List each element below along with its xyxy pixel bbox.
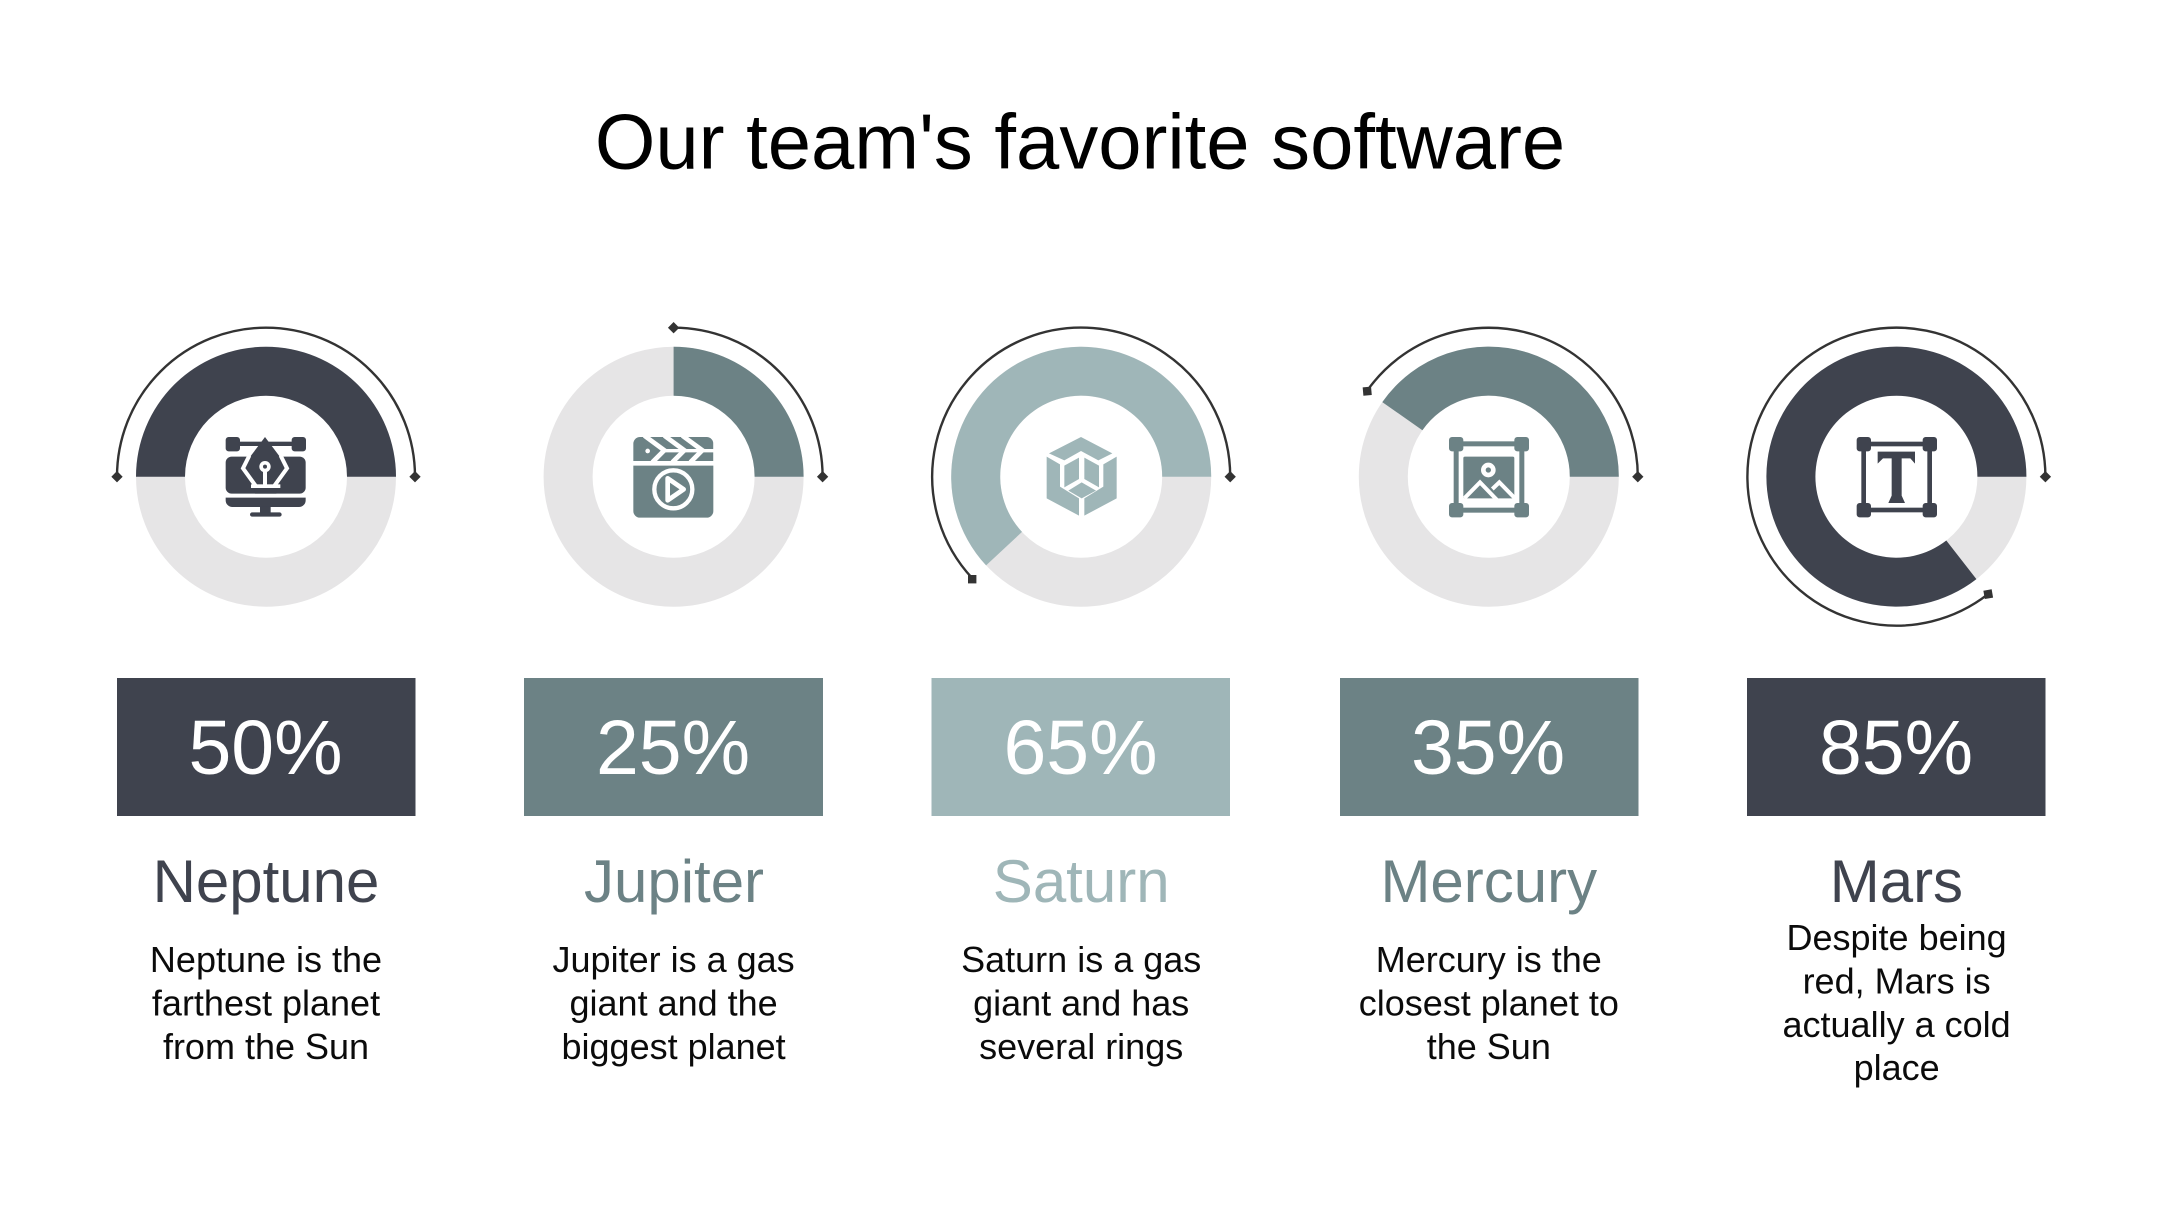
icon: video clapperboard — [633, 435, 717, 518]
value box: 35% — [1340, 678, 1638, 816]
heading: Mars: Mars — [1830, 848, 1963, 915]
text: Mercury description — [1359, 939, 1619, 1067]
panel: Mercury — [1340, 328, 1643, 1067]
text: Saturn description: Saturn is a gas — [961, 939, 1201, 980]
arc marker: Saturn — [932, 328, 1236, 583]
text: Neptune description — [150, 939, 382, 1067]
text: Mercury description: the Sun — [1427, 1026, 1551, 1067]
panel: Neptune — [111, 328, 421, 1067]
panel: Saturn — [932, 328, 1236, 1067]
text: Mars description: place — [1854, 1047, 1940, 1088]
text: Mars description: actually a cold — [1783, 1004, 2011, 1045]
text: Mercury description: Mercury is the — [1376, 939, 1602, 980]
title: Our team's favorite software — [595, 100, 1565, 186]
text: Saturn description: several rings — [979, 1026, 1183, 1067]
donut chart: Jupiter 25% — [568, 347, 804, 582]
value box: 35%: 35% — [1411, 705, 1565, 791]
value box: 25%: 25% — [596, 705, 750, 791]
value box: 65%: 65% — [1003, 705, 1158, 791]
panel: Jupiter — [524, 322, 828, 1067]
text: Jupiter description: giant and the — [570, 982, 778, 1023]
text: Neptune description: farthest planet — [152, 982, 380, 1023]
panel: Mars — [1747, 328, 2051, 1088]
icon: text frame — [1857, 437, 1937, 517]
value box: 85% — [1747, 678, 2046, 816]
donut chart: Neptune 50% — [136, 347, 396, 582]
icon: image frame — [1449, 437, 1529, 517]
value box: 85%: 85% — [1819, 705, 1973, 791]
text: Mars description — [1783, 917, 2011, 1088]
text: Mercury description: closest planet to — [1359, 982, 1619, 1023]
value box: 25% — [524, 678, 823, 816]
text: Mars description: Despite being — [1787, 917, 2007, 958]
text: Jupiter description — [553, 939, 795, 1067]
donut chart: Mercury 35% — [1382, 347, 1619, 582]
text: Neptune description: from the Sun — [163, 1026, 369, 1067]
heading: Saturn: Saturn — [993, 848, 1170, 915]
text: Mars description: red, Mars is — [1803, 960, 1991, 1001]
value box: 65% — [932, 678, 1230, 816]
icon: vector pen on monitor — [226, 437, 306, 517]
text: Jupiter description: biggest planet — [562, 1026, 786, 1067]
text: Saturn description: giant and has — [973, 982, 1189, 1023]
text: Saturn description — [961, 939, 1201, 1067]
value box: 50%: 50% — [188, 705, 343, 791]
arc marker: Mercury — [1363, 328, 1643, 482]
heading: Mercury: Mercury — [1380, 848, 1597, 915]
text: Jupiter description: Jupiter is a gas — [553, 939, 795, 980]
heading: Jupiter: Jupiter — [584, 848, 764, 915]
text: Neptune description: Neptune is the — [150, 939, 382, 980]
arc marker: Jupiter — [668, 322, 828, 482]
icon: 3D cube — [1047, 437, 1117, 516]
value box: 50% — [117, 678, 416, 816]
arc marker: Mars — [1747, 328, 2051, 626]
heading: Neptune: Neptune — [153, 848, 379, 915]
donut chart: Saturn 65% — [951, 347, 1211, 582]
arc marker: Neptune — [111, 328, 421, 482]
donut chart: Mars 85% — [1766, 347, 2026, 607]
